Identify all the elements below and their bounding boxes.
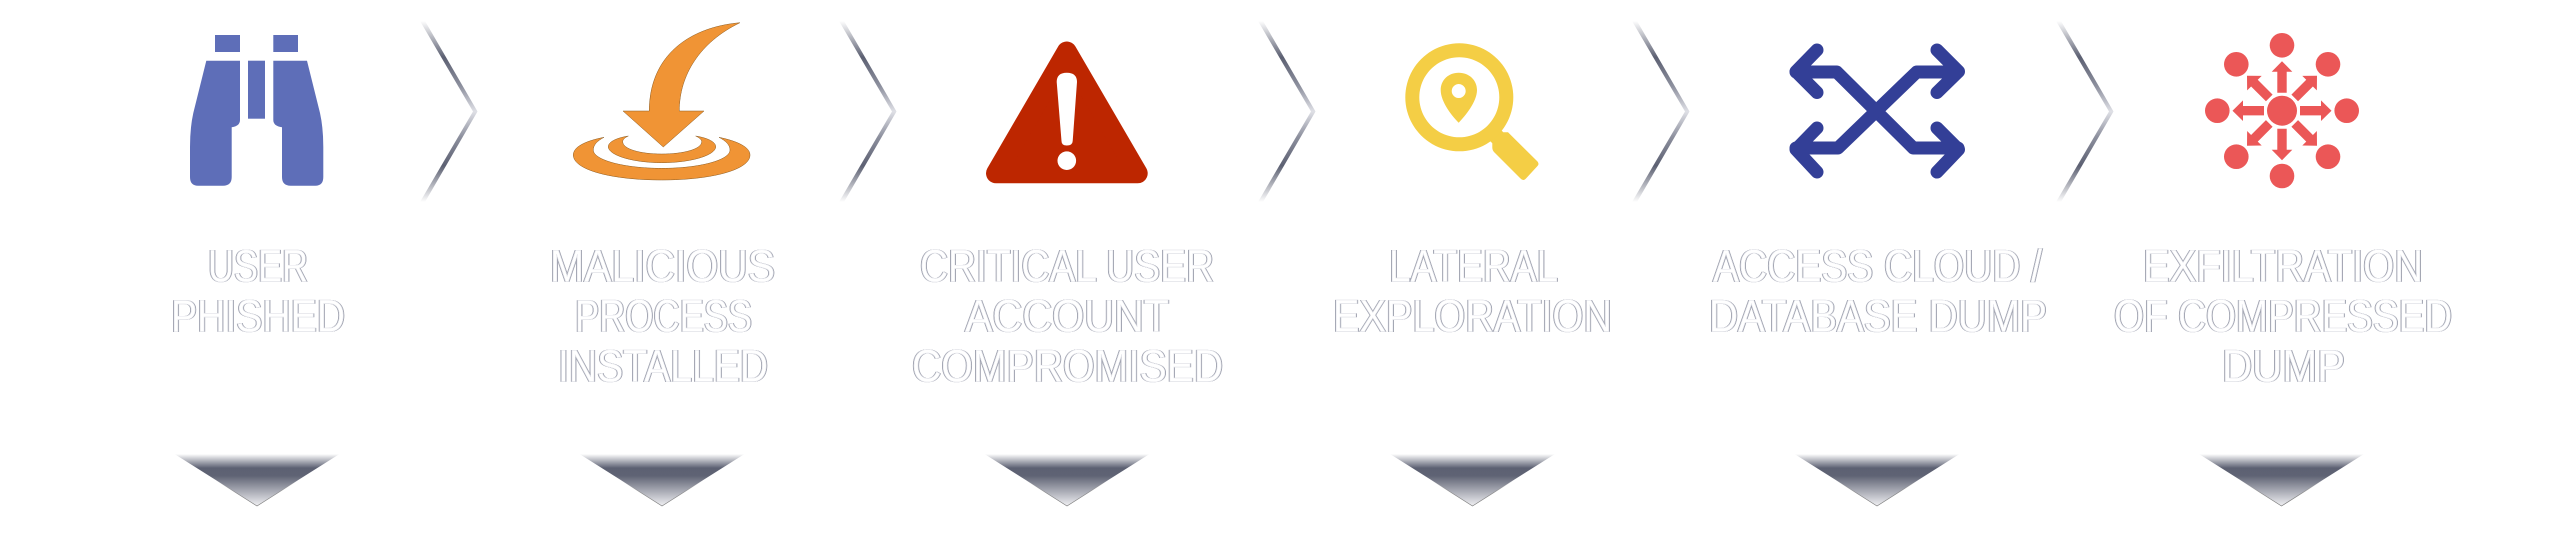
label: access cloud / database dump: [1709, 240, 2047, 342]
step 4: lateral exploration: [1333, 43, 1612, 342]
label: user phished: [171, 240, 345, 342]
label: malicious process installed: INSTALLED: [558, 340, 768, 392]
icon: crossing arrows: [1796, 50, 1958, 172]
label: lateral exploration: EXPLORATION: [1333, 290, 1612, 342]
chevron 5: [2056, 21, 2114, 202]
icon: radiating network: [2205, 33, 2359, 188]
label: user phished: USER: [208, 240, 308, 292]
label: malicious process installed: PROCESS: [575, 290, 752, 342]
label: lateral exploration: LATERAL: [1389, 240, 1558, 292]
down pointer 1: [174, 454, 340, 506]
label: user phished: PHISHED: [171, 290, 345, 342]
icon: download arrow with ripples: [573, 23, 750, 180]
down pointer 4: [1390, 454, 1555, 506]
label: exfiltration of compressed dump: [2114, 240, 2452, 392]
step 3: critical user account compromised: [912, 52, 1223, 392]
chevron 3: [1258, 21, 1316, 202]
down pointer 5: [1794, 454, 1960, 506]
label: critical user account compromised: COMPROMISED: [912, 340, 1223, 392]
label: critical user account compromised: ACCOUNT: [965, 290, 1169, 342]
label: malicious process installed: [550, 240, 775, 392]
icon: binoculars: [190, 35, 323, 186]
label: access cloud / database dump: DATABASE DUMP: [1709, 290, 2047, 342]
label: malicious process installed: MALICIOUS: [550, 240, 775, 292]
step 5: access cloud / database dump: [1709, 50, 2047, 342]
icon: warning triangle: [996, 52, 1138, 173]
label: lateral exploration: [1333, 240, 1612, 342]
label: exfiltration of compressed dump: EXFILTRATION: [2143, 240, 2423, 292]
step 6: exfiltration of compressed dump: [2114, 33, 2452, 392]
step 2: malicious process installed: [550, 23, 775, 391]
label: exfiltration of compressed dump: DUMP: [2222, 340, 2345, 392]
label: exfiltration of compressed dump: OF COMPRESSED: [2114, 290, 2452, 342]
icon: magnifier with location pin: [1405, 43, 1538, 180]
label: critical user account compromised: [912, 240, 1223, 392]
down pointer 6: [2199, 454, 2364, 506]
chevron 1: [420, 21, 478, 202]
down pointer 3: [984, 454, 1150, 506]
chevron 4: [1632, 21, 1690, 202]
chevron 2: [839, 21, 896, 202]
step 1: user phished: [171, 35, 345, 342]
down pointer 2: [580, 454, 744, 506]
label: access cloud / database dump: ACCESS CLOUD /: [1713, 240, 2042, 292]
label: critical user account compromised: CRITICAL USER: [920, 240, 1214, 292]
